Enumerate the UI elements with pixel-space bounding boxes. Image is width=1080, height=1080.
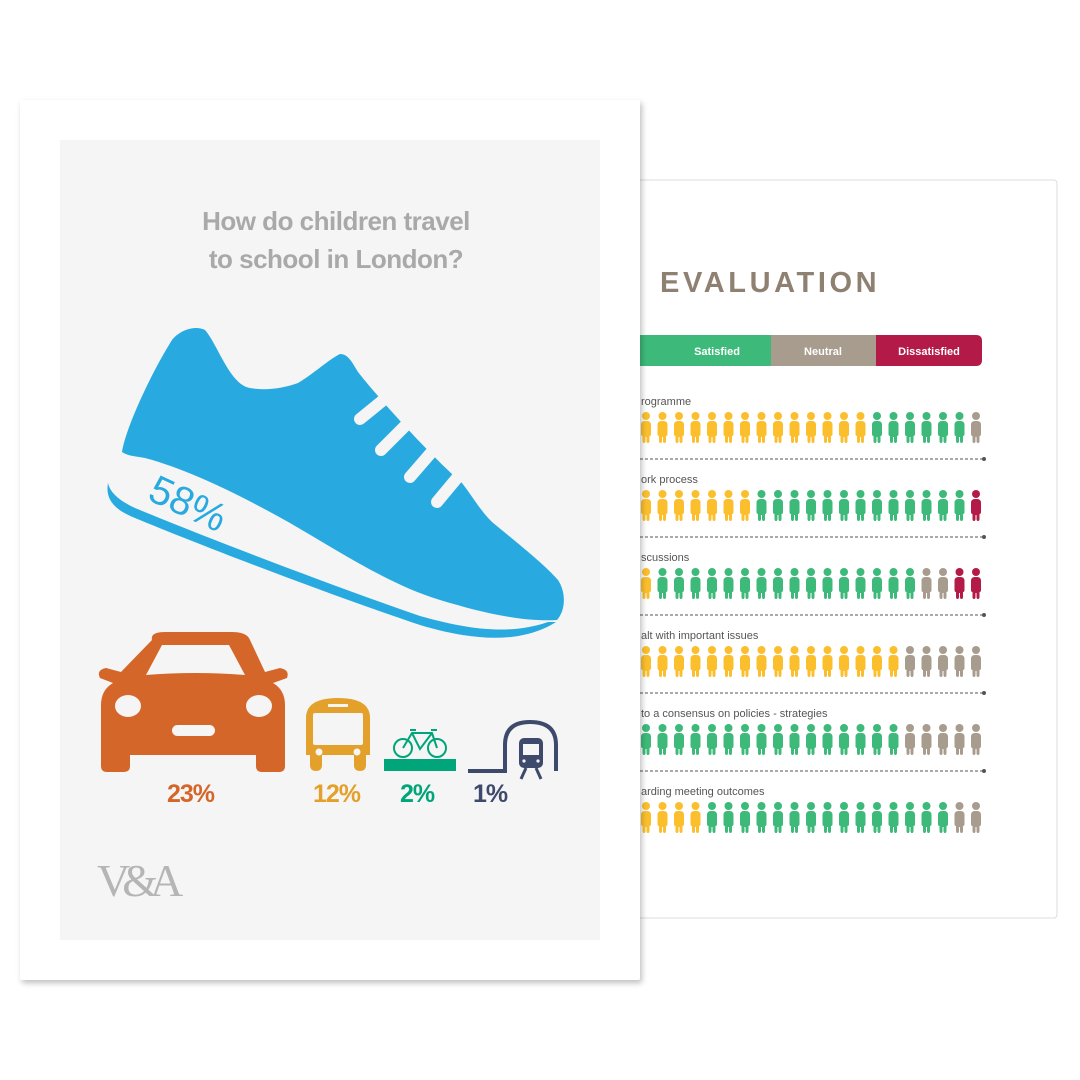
logo: V&A: V&A (97, 855, 183, 906)
row labels: ork process (641, 474, 698, 486)
percentages: 1% (473, 780, 508, 808)
row 3 (641, 568, 651, 599)
legend bar: Neutral (804, 346, 842, 358)
row labels: arding meeting outcomes (641, 786, 765, 798)
title (202, 206, 470, 274)
heading: EVALUATION: EVALUATION (660, 267, 880, 299)
row labels (641, 396, 828, 798)
panel: London travel card (20, 100, 640, 980)
legend bar: Dissatisfied (898, 346, 960, 358)
title: How do children travel (202, 206, 470, 236)
percentages: 12% (313, 780, 361, 808)
row 4 (641, 646, 898, 677)
icon: bicycle (384, 730, 456, 771)
label: 58%: 58% (142, 467, 233, 541)
title: to school in London? (209, 244, 463, 274)
row labels: scussions (641, 552, 690, 564)
dividers (640, 457, 986, 773)
row labels: rogramme (641, 396, 691, 408)
percentages: 2% (400, 780, 435, 808)
icon: bus (306, 698, 370, 771)
percentages (167, 780, 508, 808)
row labels: alt with important issues (641, 630, 759, 642)
row 6 (641, 802, 700, 833)
icon: underground train (468, 722, 556, 779)
icon: shoe (107, 328, 564, 638)
row 5 (641, 724, 898, 755)
legend bar (630, 335, 982, 366)
panel: evaluation card (628, 180, 1057, 918)
icon: car (99, 632, 288, 772)
row 1 (641, 412, 866, 443)
percentages: 23% (167, 780, 215, 808)
row labels: to a consensus on policies - strategies (641, 708, 828, 720)
legend bar: Satisfied (694, 346, 740, 358)
pictogram rows (641, 412, 981, 833)
row 2 (641, 490, 750, 521)
